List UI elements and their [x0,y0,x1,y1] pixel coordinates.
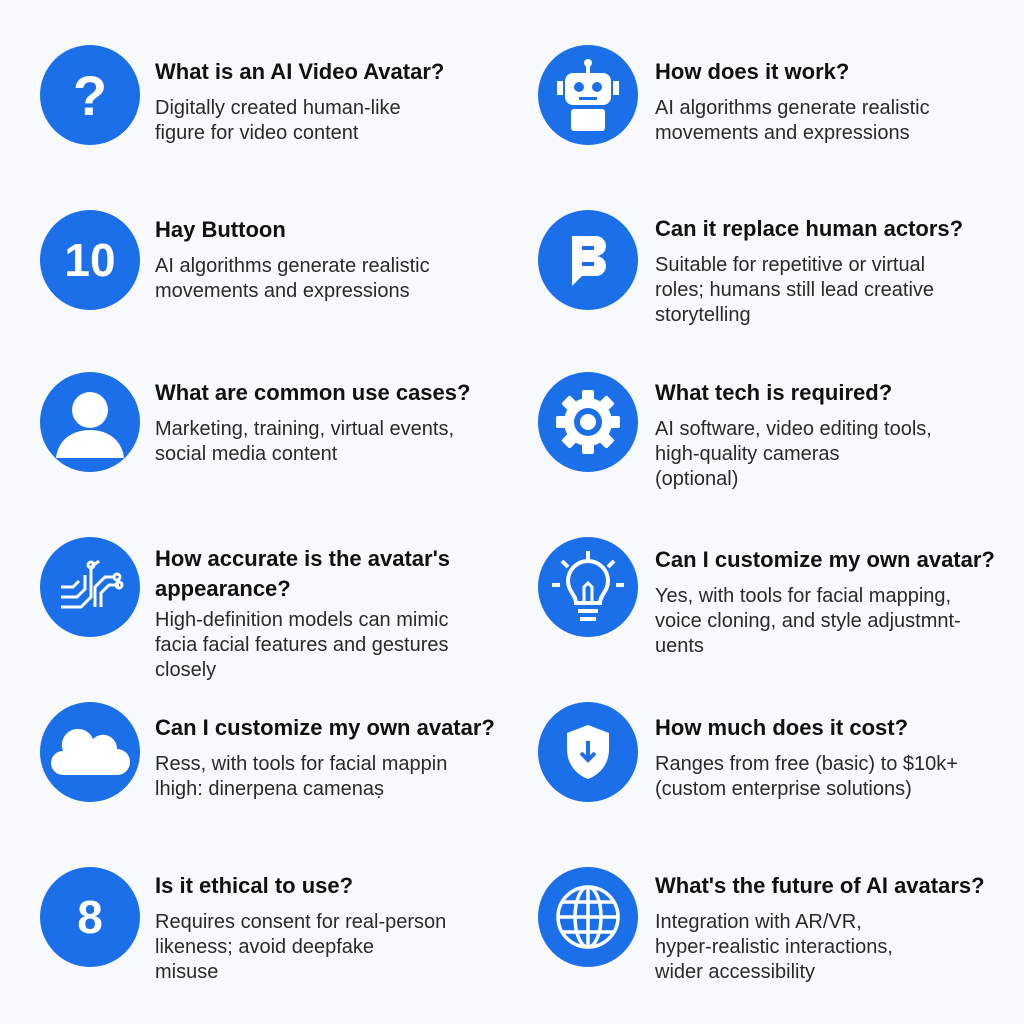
icon: globe [538,867,638,967]
icon: 8: 8 [77,891,103,943]
icon: chat [538,210,638,310]
text: accuracy [155,546,450,681]
text: replace actors: Can it replace human actors? [655,216,963,241]
text: customize right: Can I customize my own avatar? [655,547,995,572]
text: how does it work: movements and expressions [655,122,910,144]
text: replace actors: Suitable for repetitive or virtual [655,254,925,276]
text: ethical: likeness; avoid deepfake [155,936,374,958]
text: ethical: Requires consent for real-person [155,911,446,933]
text: future: What's the future of AI avatars? [655,873,985,898]
text: what is: figure for video content [155,122,358,144]
text: accuracy: closely [155,659,216,681]
text: hay button: AI algorithms generate realistic [155,255,430,277]
text: what is [155,59,444,144]
text: accuracy: High-definition models can mimic [155,609,448,631]
icon: 10 [40,210,140,310]
text: use cases: social media content [155,443,337,465]
icon: circuit [40,537,140,637]
text: replace actors: roles; humans still lead creative [655,279,934,301]
text: future [655,873,985,983]
text: hay button: Hay Buttoon [155,217,286,242]
text: accuracy: appearance? [155,576,291,601]
text: replace actors [655,216,963,326]
text: customize left: Can I customize my own avatar? [155,715,495,740]
text: accuracy: How accurate is the avatar's [155,546,450,571]
text: use cases [155,380,470,465]
text: tech required [655,380,932,490]
icon: gear [538,372,638,472]
text: ethical [155,873,446,983]
text: customize right [655,547,995,657]
text: how does it work: How does it work? [655,59,849,84]
text: how does it work: AI algorithms generate realistic [655,97,930,119]
icon: robot [538,45,638,145]
text: future: wider accessibility [655,961,815,983]
text: tech required: What tech is required? [655,380,892,405]
text: cost [655,715,958,800]
text: customize right: Yes, with tools for facial mapping, [655,585,951,607]
text: tech required: AI software, video editing tools, [655,418,932,440]
text: future: hyper-realistic interactions, [655,936,893,958]
icon: bulb [538,537,638,637]
text: hay button: movements and expressions [155,280,410,302]
text: customize right: uents [655,635,704,657]
icon: shield [538,702,638,802]
icon: cloud [40,702,140,802]
text: customize left [155,715,495,800]
text: customize right: voice cloning, and style adjustmnt- [655,610,961,632]
text: customize left: Ress, with tools for facial mappin [155,753,447,775]
icon: 10: 10 [64,234,116,286]
icon: question [40,45,140,145]
text: ethical: misuse [155,961,218,983]
text: cost: (custom enterprise solutions) [655,778,912,800]
text: cost: Ranges from free (basic) to $10k+ [655,753,958,775]
icon: question: ? [73,64,107,126]
text: what is: What is an AI Video Avatar? [155,59,444,84]
text: ethical: Is it ethical to use? [155,873,353,898]
text: replace actors: storytelling [655,304,751,326]
text: what is: Digitally created human-like [155,97,401,119]
icon: person [40,372,140,472]
text: use cases: Marketing, training, virtual events, [155,418,454,440]
text: how does it work [655,59,930,144]
text: cost: How much does it cost? [655,715,908,740]
text: use cases: What are common use cases? [155,380,470,405]
text: accuracy: facia facial features and gestures [155,634,449,656]
text: tech required: (optional) [655,468,738,490]
text: tech required: high-quality cameras [655,443,840,465]
icon: 8 [40,867,140,967]
text: future: Integration with AR/VR, [655,911,862,933]
text: hay button [155,217,430,302]
text: customize left: lhigh: dinerpena camenaṣ [155,778,384,800]
